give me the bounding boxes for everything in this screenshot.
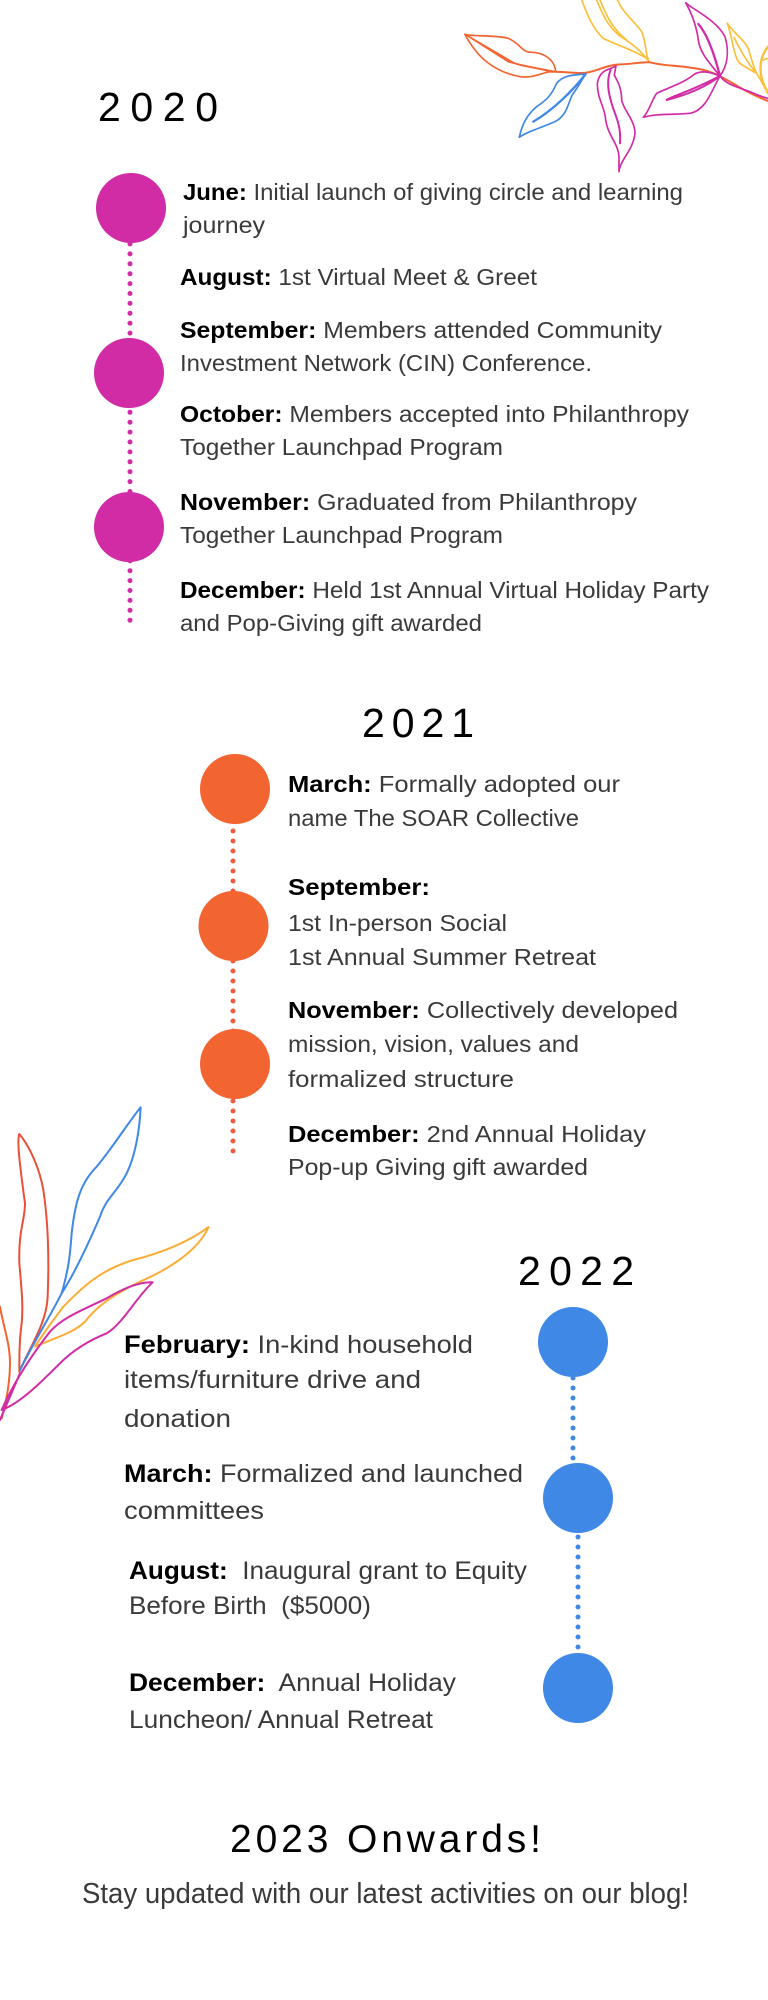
- text block: 2022 events: March: Formalized and launched: [124, 1460, 523, 1488]
- text block: 2020 events: November: Graduated from Philanthropy: [180, 489, 637, 515]
- decoration: left side leafy sprig: [0, 1107, 209, 1420]
- heading: 2023 Onwards: 2023 Onwards!: [230, 1818, 541, 1861]
- text block: 2021 events: Pop-up Giving gift awarded: [288, 1154, 588, 1180]
- text block: 2021 events: 1st Annual Summer Retreat: [288, 944, 596, 970]
- timeline: 2021 markers: [198, 754, 270, 1152]
- text block: 2020 events: Together Launchpad Program: [180, 522, 503, 548]
- text block: 2021 events: formalized structure: [288, 1066, 514, 1092]
- text block: 2022 events: committees: [124, 1497, 264, 1525]
- timeline: 2020 markers: [94, 173, 166, 627]
- text block: 2020 events: journey: [182, 212, 265, 238]
- text block: 2022 events: Before Birth ($5000): [129, 1592, 371, 1620]
- text block: 2022 events: Luncheon/ Annual Retreat: [129, 1706, 433, 1734]
- text block: 2020 events: [180, 179, 709, 636]
- heading: 2022: 2022: [518, 1248, 634, 1294]
- text block: 2020 events: and Pop-Giving gift awarded: [180, 610, 482, 636]
- text block: 2021 events: March: Formally adopted our: [288, 771, 620, 797]
- text block: 2021 events: November: Collectively developed: [288, 997, 678, 1023]
- text block: 2021 events: mission, vision, values and: [288, 1031, 579, 1057]
- text block: 2021 events: 1st In-person Social: [288, 910, 507, 936]
- text block: 2020 events: June: Initial launch of giving circle and learning: [183, 179, 683, 205]
- text block: 2022 events: August: Inaugural grant to Equity: [129, 1557, 528, 1585]
- decoration: top right leafy branch: [465, 0, 768, 172]
- text block: 2022 events: December: Annual Holiday: [129, 1669, 457, 1697]
- text block: 2021 events: December: 2nd Annual Holiday: [288, 1121, 646, 1147]
- heading: 2021: 2021: [362, 700, 474, 746]
- text block: 2020 events: Investment Network (CIN) Conference.: [180, 350, 592, 376]
- text block: 2020 events: Together Launchpad Program: [180, 434, 503, 460]
- text block: 2020 events: December: Held 1st Annual Virtual Holiday Party: [180, 577, 709, 603]
- timeline: 2022 markers: [538, 1307, 613, 1723]
- text block: 2021 events: name The SOAR Collective: [288, 805, 579, 831]
- text block: blog note: Stay updated with our latest activities on our blog!: [82, 1878, 689, 1910]
- text block: 2020 events: September: Members attended Community: [180, 317, 662, 343]
- text block: 2022 events: [124, 1331, 528, 1734]
- text block: 2022 events: items/furniture drive and: [124, 1366, 421, 1394]
- heading: 2020: 2020: [98, 84, 218, 130]
- text block: 2021 events: [288, 771, 678, 1180]
- text block: 2021 events: September:: [288, 874, 430, 900]
- text block: 2022 events: donation: [124, 1405, 231, 1433]
- text block: 2022 events: February: In-kind household: [124, 1331, 473, 1359]
- text block: 2020 events: October: Members accepted into Philanthropy: [180, 401, 689, 427]
- text block: 2020 events: August: 1st Virtual Meet & Greet: [180, 264, 537, 290]
